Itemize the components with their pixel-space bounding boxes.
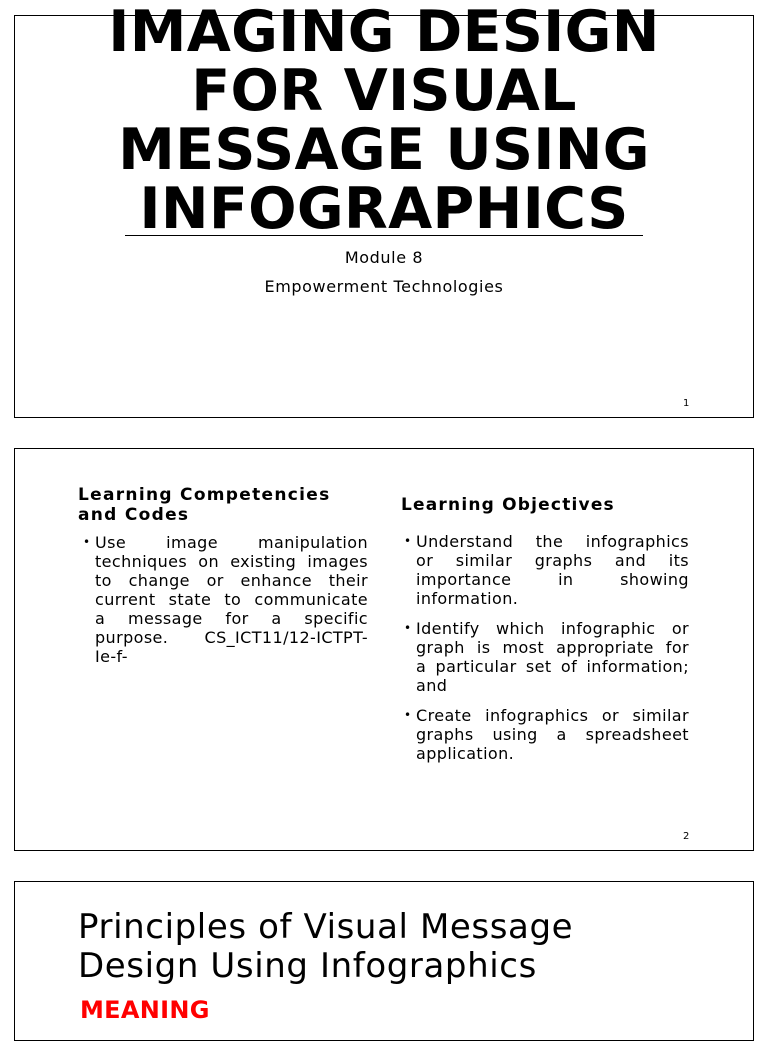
title: INFOGRAPHICS [139, 176, 629, 242]
heading: objectives: Learning Objectives [401, 495, 615, 515]
title: Design Using Infographics [78, 946, 537, 986]
heading: competencies: and Codes [78, 505, 189, 525]
panel: slide 1 [14, 15, 754, 418]
text block: competencies: current state to communicate [95, 590, 368, 609]
subtitle: Module 8 [345, 248, 423, 267]
text block: objectives: Identify which infographic or [416, 619, 689, 638]
title [78, 907, 573, 986]
text block: objectives: a particular set of information; [416, 657, 689, 676]
text block: competencies: Ie-f- [95, 647, 128, 666]
heading: meaning: MEANING [80, 996, 210, 1024]
title [108, 0, 660, 242]
text block: objectives: and [416, 676, 447, 695]
text block: competencies: a message for a specific [95, 609, 368, 628]
page number: 1 [683, 398, 689, 409]
text block: objectives: graphs using a spreadsheet [416, 725, 689, 744]
panel: slide 2 [14, 448, 754, 851]
text block: objectives: Understand the infographics [416, 532, 689, 551]
page number: 2 [683, 831, 689, 842]
text block: objectives [406, 532, 689, 763]
text block: objectives: Create infographics or similar [416, 706, 689, 725]
subtitle: Empowerment Technologies [264, 277, 503, 296]
panel: slide 3 [14, 881, 754, 1041]
text block: competencies: purpose. CS_ICT11/12-ICTPT- [95, 628, 368, 647]
title: FOR VISUAL [191, 58, 577, 124]
text block: objectives: application. [416, 744, 514, 763]
text block: competencies: Use image manipulation [95, 533, 368, 552]
title: MESSAGE USING [118, 117, 650, 183]
text block: objectives: importance in showing [416, 570, 689, 589]
text block: competencies: to change or enhance their [95, 571, 368, 590]
title: Principles of Visual Message [78, 907, 573, 947]
divider line [125, 235, 643, 236]
text block: objectives: graph is most appropriate for [416, 638, 689, 657]
heading: competencies [78, 485, 331, 525]
title: IMAGING DESIGN [108, 0, 660, 65]
text block: competencies [84, 533, 368, 666]
text block: competencies: techniques on existing images [95, 552, 368, 571]
text block: objectives: or similar graphs and its [416, 551, 689, 570]
subtitle [264, 248, 503, 296]
heading: competencies: Learning Competencies [78, 485, 331, 505]
text block: objectives: information. [416, 589, 518, 608]
